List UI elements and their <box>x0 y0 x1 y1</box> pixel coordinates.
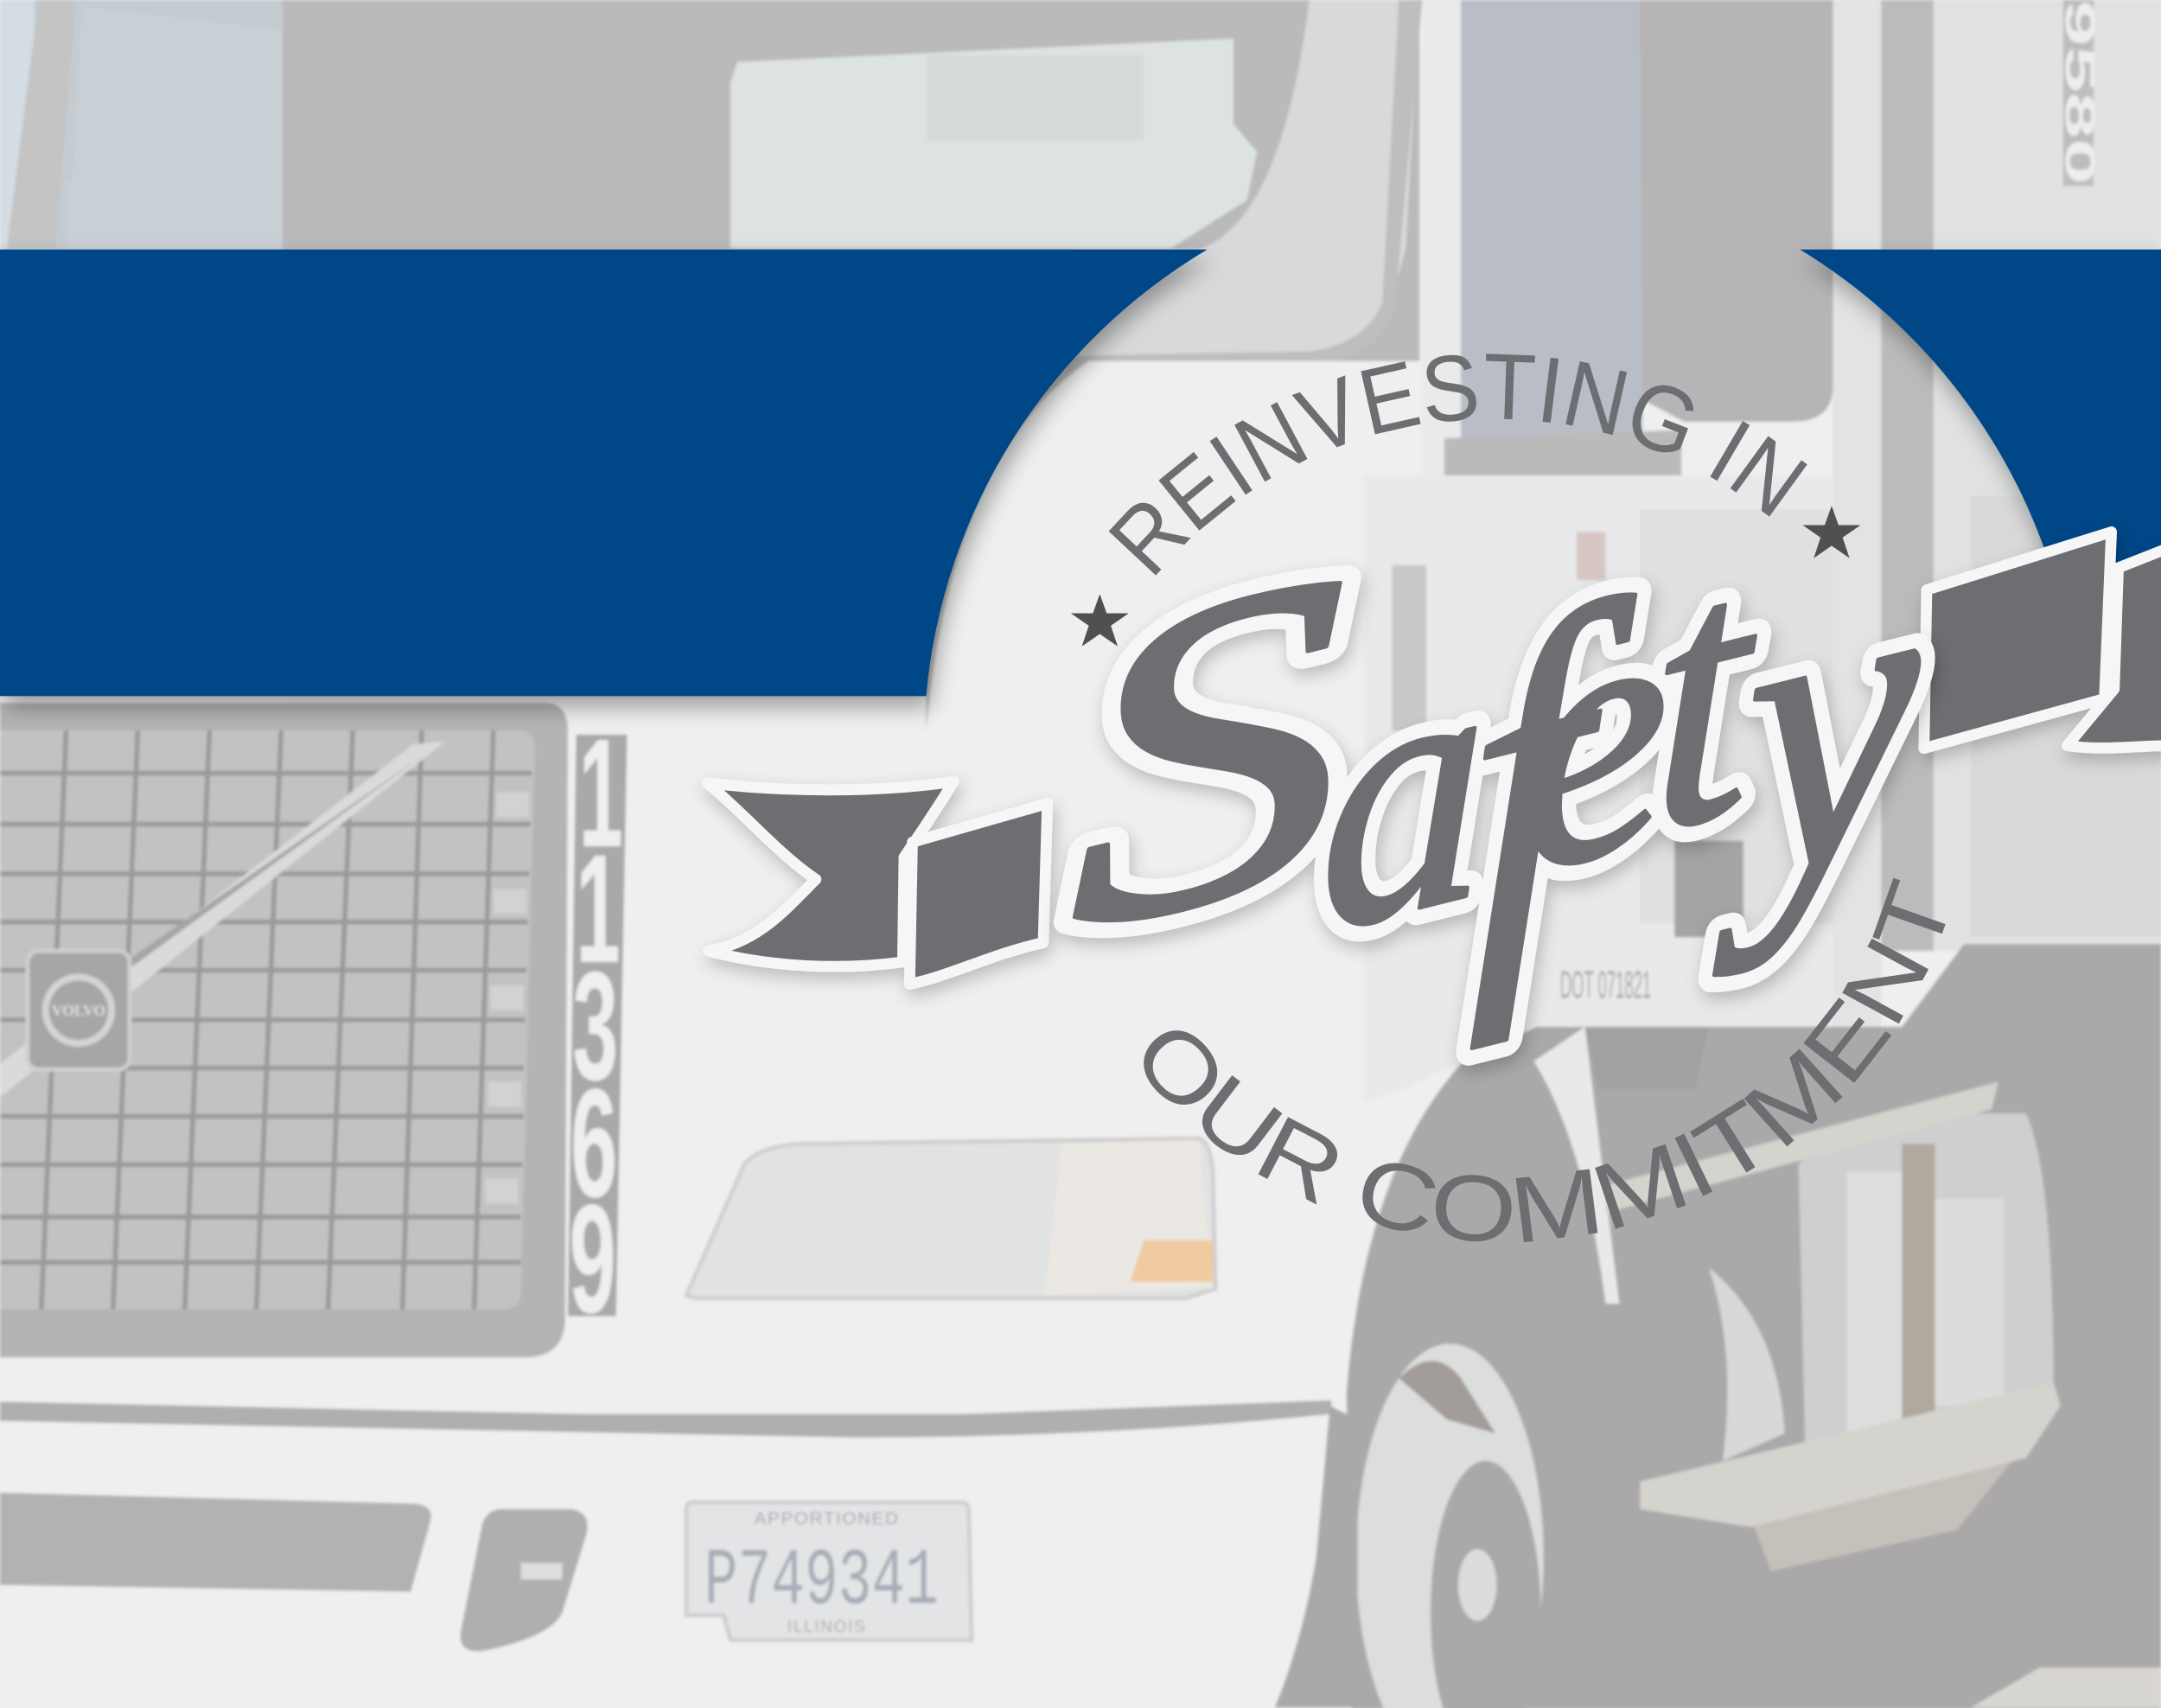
headlight <box>686 1138 1215 1298</box>
script wordmark: safety (outline): t <box>1652 476 1761 912</box>
script wordmark: safety (outline): f <box>1467 505 1641 1052</box>
trailer number <box>2063 0 2094 186</box>
script wordmark: safety: f <box>1467 505 1641 1052</box>
mirror <box>1640 0 1833 422</box>
wheel <box>1356 1344 1544 1708</box>
license plate <box>686 1502 972 1640</box>
script wordmark: safety: a <box>1320 574 1488 1010</box>
volvo diagonal bar <box>0 742 445 1097</box>
background photo: white truck front: 1 <box>576 822 620 995</box>
script wordmark: safety (outline): S <box>1068 473 1348 1029</box>
script wordmark: safety: S <box>1068 473 1348 1029</box>
grille outer frame <box>0 703 568 1358</box>
bumper fog slot <box>0 1493 431 1592</box>
grille side steps <box>485 793 529 1203</box>
blue band with circular cut-out <box>0 250 2161 696</box>
background photo: white truck front: ILLINOIS <box>787 1618 866 1636</box>
tank straps lower <box>1750 1461 2012 1571</box>
hood/bumper seam <box>0 1400 1331 1437</box>
bumper corner <box>1275 1405 1357 1708</box>
trailer column strips <box>1833 0 1881 1027</box>
script wordmark: safety: e <box>1520 520 1669 951</box>
script wordmark: safety <box>1068 435 1922 1088</box>
script wordmark: safety (outline) <box>1068 435 1922 1088</box>
background photo: white truck front: VOLVO <box>52 1002 105 1019</box>
lower right dark undercarriage <box>1347 944 2161 1708</box>
background photo: white truck front: 3 <box>572 939 618 1112</box>
grille grid <box>0 730 532 1310</box>
background photo: white truck front: P749341 <box>704 1536 939 1627</box>
icon: left star <box>1071 594 1129 647</box>
flag <box>1577 532 1605 580</box>
curved heading: our commitment: OUR COMMITMENT <box>1144 878 1946 1243</box>
background photo: white truck front: 9 <box>569 1172 616 1345</box>
icon: right star <box>1802 506 1860 558</box>
windshield frame <box>1075 0 1419 361</box>
hood top panel <box>0 696 926 1365</box>
ribbon fold <box>1924 532 2112 749</box>
background photo: white truck front: 6 <box>571 1056 617 1229</box>
script wordmark: safety (outline): a <box>1320 574 1488 1010</box>
fuel tanks <box>1799 1113 2054 1461</box>
step <box>1640 1382 2061 1527</box>
trailer seen through windshield <box>730 39 1257 248</box>
volvo badge <box>28 951 130 1069</box>
ribbon: right <box>1924 532 2161 749</box>
tow hook hole <box>461 1509 588 1651</box>
left blue panel <box>0 250 1208 696</box>
unit number strip <box>568 735 627 1316</box>
ribbon tail <box>707 781 953 966</box>
door panel <box>1364 475 1833 1103</box>
script wordmark: safety (outline): e <box>1520 520 1669 951</box>
ribbon tail <box>2068 547 2161 748</box>
cab interior <box>0 0 1419 730</box>
background photo: white truck front: 1 <box>579 706 623 879</box>
ribbon: left <box>707 781 1048 984</box>
script wordmark: safety: t <box>1652 476 1761 912</box>
fender strip <box>1534 1027 1619 1303</box>
cab body white under windshield <box>926 361 1461 730</box>
door window <box>1461 0 1643 475</box>
script wordmark: safety: y <box>1711 471 1922 980</box>
background photo: white truck front: APPORTIONED <box>755 1508 900 1528</box>
curved heading: reinvesting in: REINVESTING IN <box>1108 354 1807 576</box>
script wordmark: safety (outline): y <box>1711 471 1922 980</box>
ribbon fold <box>909 804 1048 984</box>
background photo: white truck front: 9580 <box>2056 0 2102 185</box>
background photo: white truck front: DOT 071821 <box>1560 964 1651 1006</box>
ground patch <box>1971 1667 2161 1708</box>
grille inner <box>0 730 535 1310</box>
left side window <box>0 0 283 730</box>
right blue panel <box>1800 250 2161 586</box>
